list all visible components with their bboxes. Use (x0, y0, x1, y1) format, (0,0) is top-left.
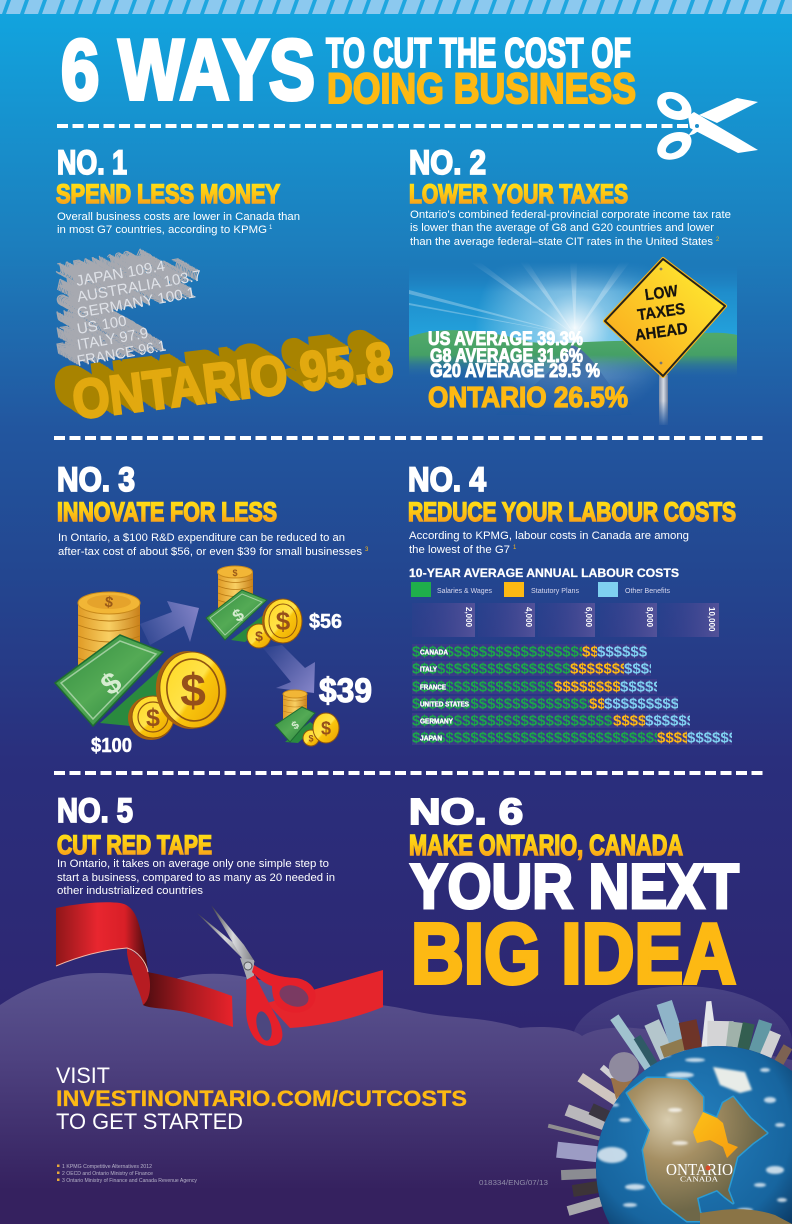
data: tax averages: G20 AVERAGE 29.5 % (430, 360, 600, 382)
text block: after-tax cost of about $56, or even $39 for small businesses (58, 546, 363, 558)
icon: money 56: $ (229, 605, 248, 626)
illustration: skyline around globe (548, 1000, 792, 1216)
subheading: CUT RED TAPE (57, 830, 212, 860)
title: TO CUT THE COST OF (326, 29, 631, 76)
heading: No. 5: NO. 5 (57, 792, 133, 830)
icon: money 100 (55, 592, 231, 740)
legend: Statutory Plans (531, 588, 580, 595)
text block: start a business, compared to as many as 20 needed in (57, 872, 335, 884)
icon: Ontario map (693, 1112, 738, 1158)
job code: 018334/ENG/07/13 (479, 1178, 548, 1187)
axis: 8,000 (645, 607, 654, 628)
chart: 3D cost index: GERMANY 100.1 (76, 284, 197, 322)
bar: United States: $$$$$$$$$ (604, 696, 680, 712)
bar: United States (412, 696, 680, 712)
text block: In Ontario, a $100 R&D expenditure can be reduced to an (58, 532, 345, 544)
heading: No. 4: NO. 4 (408, 461, 486, 499)
legend: Salaries & Wages (437, 588, 492, 595)
axis: 6,000 (584, 607, 593, 628)
subheading: MAKE ONTARIO, CANADA (409, 830, 683, 862)
icon: low taxes sign: LOW (644, 283, 680, 304)
label: $39: $39 (319, 672, 372, 710)
icon: money 56: $ (232, 568, 238, 578)
text block (57, 858, 335, 897)
panel: No. 3 (55, 461, 372, 757)
bar: Japan: $$$$$$ (687, 730, 738, 746)
arrow: 56 to 39 (263, 645, 315, 693)
icon: money 39: $ (290, 719, 302, 732)
data: tax averages: G8 AVERAGE 31.6% (430, 345, 583, 367)
call to action: VISIT (56, 1063, 110, 1088)
text block: Ontario's combined federal-provincial corporate income tax rate (410, 209, 731, 221)
illustration: red scissors (197, 905, 316, 1046)
illustration: globe (596, 1046, 792, 1224)
axis: 2,000 (464, 607, 473, 628)
legend: Other Benefits (625, 588, 670, 595)
icon: money 100: $ (146, 704, 160, 732)
icon: money 100: $ (104, 593, 115, 612)
label: $56: $56 (309, 611, 342, 633)
footnotes: 3 Ontario Ministry of Finance and Canada Revenue Agency (62, 1178, 197, 1184)
footnotes: 1 KPMG Competitive Alternatives 2012 (62, 1164, 152, 1170)
icon: money 39 (275, 690, 339, 746)
text block: in most G7 countries, according to KPMG (57, 224, 267, 236)
text block (57, 211, 300, 236)
bar: United States: $$$$$$$$$$$$$$$$$$$$$$ (412, 696, 596, 712)
bar: Germany: $$$$ (613, 712, 647, 730)
panel: No. 1 (56, 144, 396, 431)
title (61, 23, 636, 118)
text block: In Ontario, it takes on average only one simple step to (57, 858, 329, 870)
icon: money 100: $ (180, 664, 206, 716)
text block: other industrialized countries (57, 885, 204, 897)
text block: is lower than the average of G8 and G20 countries and lower (410, 222, 714, 234)
bar: Canada: $$ (582, 644, 599, 660)
panel: No. 2 (409, 144, 737, 425)
icon: money 56: $ (255, 628, 263, 644)
slogan (410, 852, 739, 1002)
bar: Italy: $$$$$$$ (570, 660, 629, 678)
icon: money 56: $ (276, 606, 291, 636)
text block: the lowest of the G7 (409, 544, 510, 556)
dashed divider with scissors cut (57, 124, 692, 128)
bar: France: $$$$$ (620, 678, 662, 696)
title: 6 WAYS (61, 23, 315, 118)
panel: No. 4 (408, 461, 738, 746)
subheading: INNOVATE FOR LESS (57, 497, 277, 527)
heading: No. 2: NO. 2 (409, 144, 486, 182)
bar: United States: $$ (589, 696, 606, 712)
text block: 2 (716, 237, 720, 243)
bar: Germany: $$$$$$ (645, 712, 696, 730)
bar: Japan: $$$$ (657, 730, 691, 746)
footnotes: 2 OECD and Ontario Ministry of Finance (62, 1171, 153, 1177)
chart: 3D cost index (69, 258, 396, 431)
slogan: BIG IDEA (411, 907, 736, 1002)
bar: Italy (412, 660, 658, 678)
bar: Germany: $$$$$$$$$$$$$$$$$$$$$$$$$ (412, 712, 621, 730)
text block: According to KPMG, labour costs in Canada are among (409, 530, 689, 542)
icon: money 39: $ (308, 734, 314, 744)
call to action: TO GET STARTED (56, 1109, 243, 1134)
icon: scissors (657, 92, 758, 160)
axis (412, 603, 719, 637)
panel: No. 5 (56, 792, 383, 1046)
title: DOING BUSINESS (327, 65, 636, 113)
legend (411, 582, 670, 597)
chart: 3D cost index: ONTARIO 95.8 (69, 330, 396, 431)
axis: 10,000 (707, 607, 716, 632)
clouds (0, 973, 792, 1224)
icon: money 56 (206, 566, 302, 648)
bar: Japan: $$$$$$$$$$$$$$$$$$$$$$$$$$$$$$ (412, 730, 663, 746)
slogan: YOUR NEXT (410, 852, 739, 922)
heading: No. 3: NO. 3 (57, 461, 135, 499)
label: $100: $100 (91, 735, 132, 757)
bar: France: $$$$$$$$$$$$$$$$$$ (412, 678, 563, 696)
logo: ONTARIO (666, 1160, 733, 1179)
bar: Italy: ITALY (420, 664, 437, 674)
icon: money 39: $ (321, 718, 331, 738)
data: tax averages: ONTARIO 26.5% (428, 382, 628, 414)
heading: No. 1: NO. 1 (57, 144, 127, 182)
text block: than the average federal–state CIT rates in the United States (410, 236, 714, 248)
bar: United States: UNITED STATES (420, 700, 469, 708)
bar: France: FRANCE (420, 682, 446, 692)
chart title: 10-YEAR AVERAGE ANNUAL LABOUR COSTS (409, 566, 679, 580)
footnotes (57, 1164, 197, 1184)
text block (58, 532, 369, 558)
top stripe band (0, 0, 792, 14)
bar: Italy: $$$$$$$$$$$$$$$$$$$ (412, 660, 571, 678)
bar: France: $$$$$$$$ (554, 678, 621, 696)
axis: 4,000 (524, 607, 533, 628)
chart: 3D cost index: FRANCE 96.1 (76, 338, 167, 370)
text block: 1 (513, 545, 517, 551)
text block: 3 (365, 547, 369, 553)
bar: Canada: $$$$$$ (597, 644, 648, 660)
chart: 3D cost index: ITALY 97.9 (76, 325, 150, 354)
bar: Germany: GERMANY (420, 716, 453, 726)
text block: 1 (269, 225, 273, 231)
text block: Overall business costs are lower in Canada than (57, 211, 300, 223)
chart: labour costs (409, 566, 738, 746)
chart: 3D cost index: AUSTRALIA 103.7 (76, 267, 203, 306)
icon: low taxes sign: TAXES (636, 301, 687, 324)
logo: CANADA (680, 1174, 719, 1184)
subheading: LOWER YOUR TAXES (409, 179, 628, 209)
bar: Canada: $$$$$$$$$$$$$$$$$$$$$ (412, 644, 588, 660)
illustration: red ribbon (56, 902, 383, 1028)
bar: Japan: JAPAN (420, 734, 442, 742)
icon: low taxes sign: AHEAD (634, 320, 689, 345)
text block (409, 530, 689, 556)
panel: No. 6 (409, 791, 739, 1002)
call to action (56, 1063, 467, 1134)
data: tax averages (428, 328, 628, 414)
chart: 3D cost index: US 100 (76, 313, 128, 338)
icon: money 100: $ (95, 666, 128, 702)
arrow: 100 to 56 (140, 601, 199, 645)
heading: No. 6: NO. 6 (409, 791, 523, 832)
call to action: INVESTINONTARIO.COM/CUTCOSTS (56, 1086, 467, 1111)
bar: Italy: $$$$ (624, 660, 658, 678)
bar: Canada: CANADA (420, 648, 449, 656)
chart: 3D cost index: JAPAN 109.4 (75, 258, 166, 290)
data: tax averages: US AVERAGE 39.3% (428, 328, 583, 350)
illustration: road under sky (409, 264, 737, 402)
subheading: SPEND LESS MONEY (56, 179, 280, 209)
icon: low taxes sign (605, 259, 725, 425)
bar: France (412, 678, 662, 696)
text block (410, 209, 731, 248)
